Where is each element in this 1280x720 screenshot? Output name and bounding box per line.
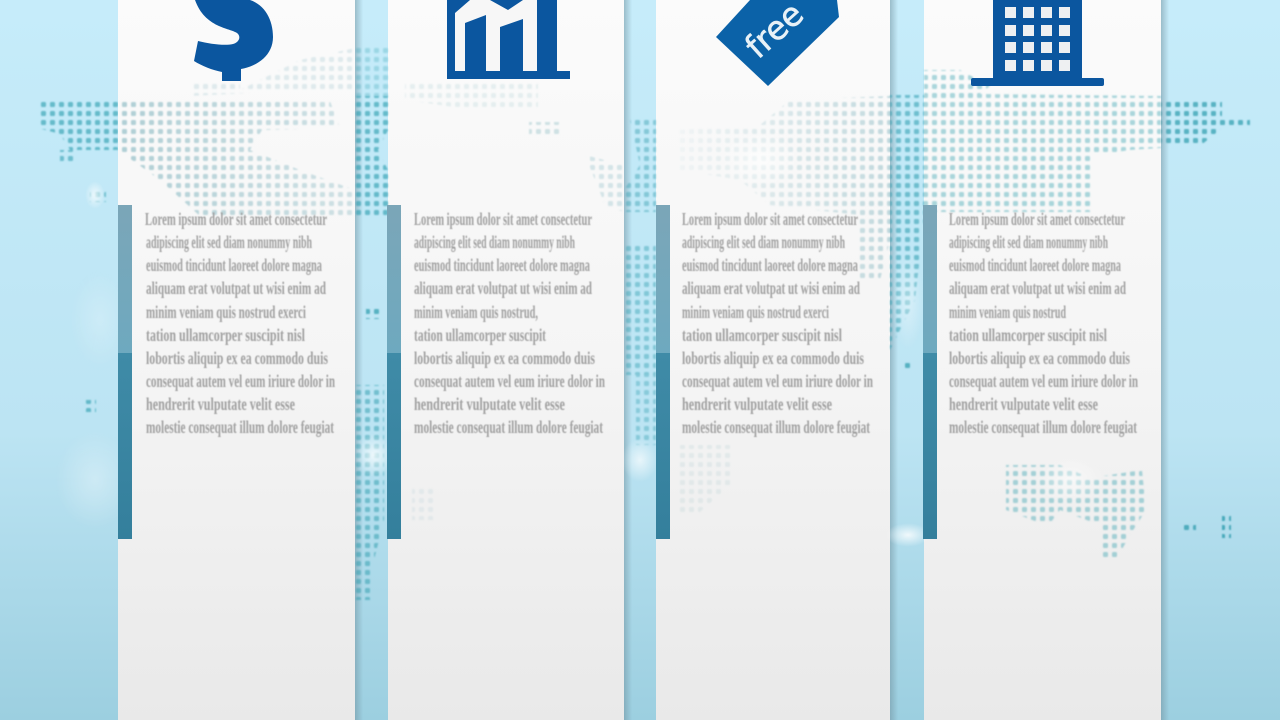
text block: column 1: aliquam erat volutpat ut wisi enim ad [146,278,326,298]
map: column 1 edge and gap [354,46,388,96]
panel: column 4 [924,0,1169,720]
panel: column 1 [118,0,363,720]
icon: dollar sign [194,0,273,81]
icon: office building [971,0,1104,86]
text block: column 3: euismod tincidunt laoreet dolore magna [682,255,858,275]
world map dots over panels [118,46,1161,600]
text block: column 2: euismod tincidunt laoreet dolore magna [414,255,590,275]
text block: column 3: molestie consequat illum dolore feugiat [682,417,870,437]
text block: column 1: molestie consequat illum dolore feugiat [146,417,334,437]
text block: column 3: hendrerit vulputate velit esse [682,394,832,414]
map: north america [118,101,355,216]
text block: column 3: adipiscing elit sed diam nonummy nibh [682,232,845,252]
text block: column 4: adipiscing elit sed diam nonummy nibh [949,232,1108,252]
text block: column 4: hendrerit vulputate velit esse [949,394,1098,414]
map: column 3 [680,96,890,280]
text block: column 2: tation ullamcorper suscipit [414,325,546,345]
map dots on background [38,100,1250,538]
text block: column 2: Lorem ipsum dolor sit amet consectetur [414,209,592,229]
text block: column 1: lobortis aliquip ex ea commodo duis [146,348,328,368]
text block: column 3: minim veniam quis nostrud exerci [682,302,829,322]
map: gap 2 [624,120,656,212]
accent bar 4 [923,205,937,539]
text block: column 3: lobortis aliquip ex ea commodo duis [682,348,864,368]
text block: column 1 [145,209,335,437]
text block: column 1: consequat autem vel eum iriure dolor in [146,371,335,391]
text block: column 4: minim veniam quis nostrud [949,302,1066,322]
text block: column 3: Lorem ipsum dolor sit amet consectetur [682,209,858,229]
text block: column 4: consequat autem vel eum iriure dolor in [949,371,1138,391]
text block: column 2: aliquam erat volutpat ut wisi enim ad [414,278,592,298]
map: arctic [190,48,355,96]
panel: column 2 [388,0,632,720]
text block: column 4: tation ullamcorper suscipit nisl [949,325,1107,345]
text block: column 1: minim veniam quis nostrud exerci [146,302,306,322]
text block: column 1: Lorem ipsum dolor sit amet consectetur [145,209,327,229]
icon: bar chart building [447,0,570,79]
text block: column 1: hendrerit vulputate velit esse [146,394,295,414]
map: asia column 4 [924,70,1161,212]
text block: column 4: euismod tincidunt laoreet dolore magna [949,255,1121,275]
text block: column 3 [682,209,873,437]
text block: column 1: adipiscing elit sed diam nonummy nibh [146,232,312,252]
text block: column 2: molestie consequat illum dolore feugiat [414,417,603,437]
icon: free tag [716,0,839,86]
text block: column 4: aliquam erat volutpat ut wisi enim ad [949,278,1126,298]
accent bar 3 [656,205,670,539]
text block: column 2: lobortis aliquip ex ea commodo duis [414,348,595,368]
text block: column 4 [949,209,1138,437]
text block: column 1: tation ullamcorper suscipit nisl [146,325,305,345]
map: gap 3 [890,95,924,350]
text block: column 4: molestie consequat illum dolore feugiat [949,417,1137,437]
map: australia [1006,465,1146,560]
map: column 2 fragments [405,84,538,108]
text block: column 1: euismod tincidunt laoreet dolore magna [146,255,322,275]
glow accents [55,132,1104,547]
text block: column 2: hendrerit vulputate velit esse [414,394,565,414]
accent bar 1 [118,205,132,539]
accent bar 2 [387,205,401,539]
text block: column 2: minim veniam quis nostrud, [414,302,538,322]
text block: column 4: lobortis aliquip ex ea commodo duis [949,348,1130,368]
text block: column 2: adipiscing elit sed diam nonummy nibh [414,232,575,252]
text block: column 2: consequat autem vel eum iriure dolor in [414,371,605,391]
panel: column 3 [656,0,898,720]
text block: column 2 [414,209,605,437]
text block: column 4: Lorem ipsum dolor sit amet consectetur [949,209,1125,229]
text block: column 3: aliquam erat volutpat ut wisi enim ad [682,278,860,298]
text block: column 3: tation ullamcorper suscipit nisl [682,325,842,345]
text block: column 3: consequat autem vel eum iriure dolor in [682,371,873,391]
